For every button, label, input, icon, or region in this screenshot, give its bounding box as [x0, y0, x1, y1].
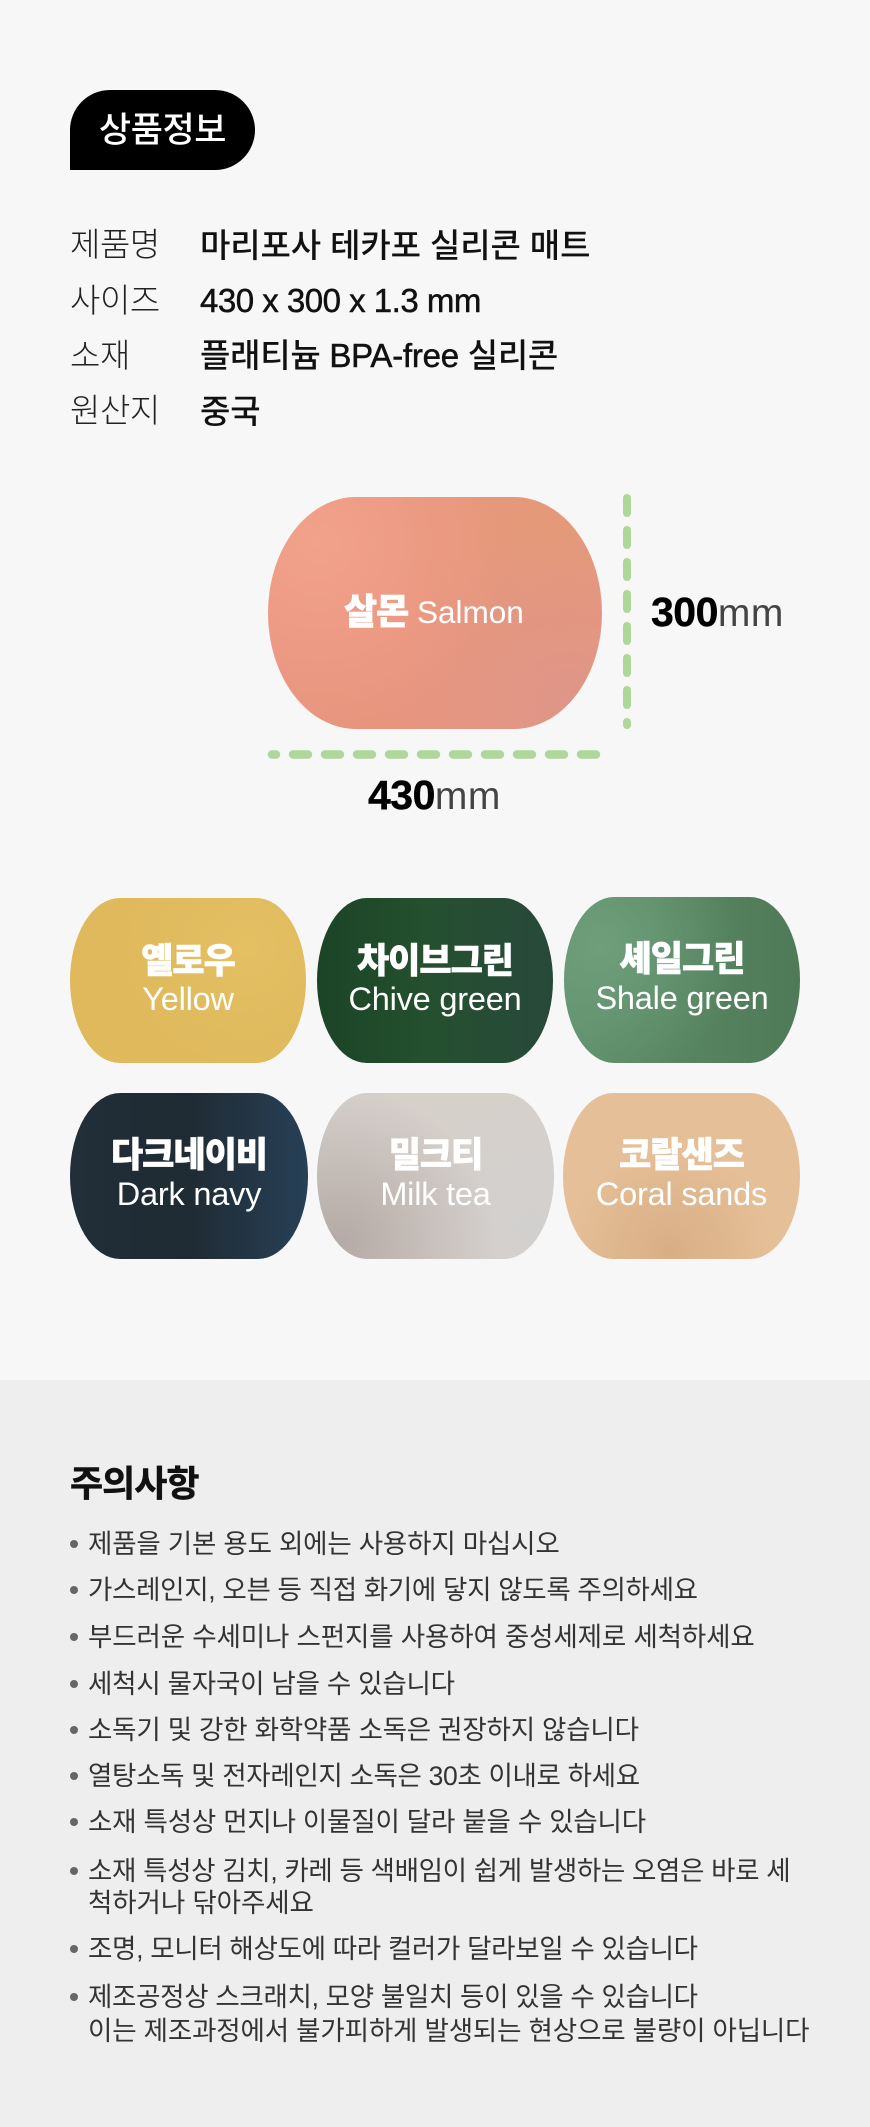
- salmon mat with label: [268, 497, 602, 729]
- bullet 3: [70, 1633, 78, 1641]
- bullet 8: [70, 1867, 78, 1875]
- chive green english name: Chive green: [348, 981, 522, 1017]
- swatch: chive green: [317, 898, 553, 1063]
- yellow english name: Yellow: [142, 981, 234, 1017]
- item 6: 열탕소독 및 전자레인지 소독은 30초 이내로 하세요: [88, 1761, 640, 1791]
- item 10 line 1: 제조공정상 스크래치, 모양 불일치 등이 있을 수 있습니다: [88, 1982, 698, 2012]
- spec: size label: 사이즈: [70, 282, 160, 319]
- yellow korean name: 옐로우: [141, 942, 235, 981]
- salmon english label: Salmon: [417, 594, 524, 630]
- chive green korean name: 차이브그린: [357, 942, 513, 981]
- swatch: coral sands: [563, 1093, 800, 1259]
- item 9: 조명, 모니터 해상도에 따라 컬러가 달라보일 수 있습니다: [88, 1934, 698, 1964]
- width dimension dashed line: [268, 750, 600, 759]
- item 8 line 2: 척하거나 닦아주세요: [88, 1888, 314, 1918]
- cautions heading: 주의사항: [70, 1463, 198, 1504]
- height dimension dashed line: [623, 494, 631, 729]
- spec: origin value: 중국: [200, 393, 261, 430]
- swatch: shale green: [564, 897, 800, 1063]
- item 5: 소독기 및 강한 화학약품 소독은 권장하지 않습니다: [88, 1715, 639, 1745]
- dark navy korean name: 다크네이비: [111, 1136, 267, 1175]
- milk tea english name: Milk tea: [380, 1176, 491, 1212]
- spec: material label: 소재: [70, 337, 130, 374]
- item 3: 부드러운 수세미나 스펀지를 사용하여 중성세제로 세척하세요: [88, 1622, 755, 1652]
- shale green korean name: 셰일그린: [620, 940, 744, 979]
- coral sands english name: Coral sands: [596, 1176, 767, 1212]
- bullet list: [70, 1529, 809, 2046]
- salmon korean label: 살몬: [344, 591, 408, 632]
- milk tea korean name: 밀크티: [389, 1136, 482, 1175]
- spec: size value: 430 x 300 x 1.3 mm: [200, 282, 481, 319]
- bullet 1: [70, 1540, 78, 1548]
- spec table: [70, 226, 590, 430]
- item 2: 가스레인지, 오븐 등 직접 화기에 닿지 않도록 주의하세요: [88, 1575, 698, 1605]
- bullet 9: [70, 1945, 78, 1953]
- heading: product info badge: [70, 90, 255, 170]
- item 4: 세척시 물자국이 남을 수 있습니다: [88, 1669, 455, 1699]
- bullet 5: [70, 1726, 78, 1734]
- item 1: 제품을 기본 용도 외에는 사용하지 마십시오: [88, 1529, 560, 1559]
- bullet 10: [70, 1993, 78, 2001]
- swatch: yellow: [70, 898, 306, 1063]
- bullet 2: [70, 1586, 78, 1594]
- item 7: 소재 특성상 먼지나 이물질이 달라 붙을 수 있습니다: [88, 1807, 646, 1837]
- coral sands korean name: 코랄샌즈: [619, 1136, 744, 1175]
- height dimension text: 300mm: [651, 589, 784, 635]
- dark navy english name: Dark navy: [117, 1176, 261, 1212]
- shale green english name: Shale green: [595, 980, 769, 1016]
- swatch: milk tea: [317, 1093, 554, 1259]
- heading: product info badge: 상품정보: [99, 111, 226, 150]
- item 10 line 2: 이는 제조과정에서 불가피하게 발생되는 현상으로 불량이 아닙니다: [88, 2016, 809, 2046]
- spec: material value: 플래티늄 BPA-free 실리콘: [200, 337, 558, 374]
- spec: product name label: 제품명: [70, 226, 160, 263]
- width dimension text: 430mm: [368, 772, 501, 818]
- bullet 7: [70, 1818, 78, 1826]
- bullet 4: [70, 1680, 78, 1688]
- swatch: dark navy: [70, 1093, 308, 1259]
- spec: product name value: 마리포사 테카포 실리콘 매트: [200, 227, 590, 264]
- bullet 6: [70, 1772, 78, 1780]
- item 8 line 1: 소재 특성상 김치, 카레 등 색배임이 쉽게 발생하는 오염은 바로 세: [88, 1856, 790, 1886]
- panel: cautions: [0, 1380, 870, 2127]
- spec: origin label: 원산지: [70, 392, 160, 429]
